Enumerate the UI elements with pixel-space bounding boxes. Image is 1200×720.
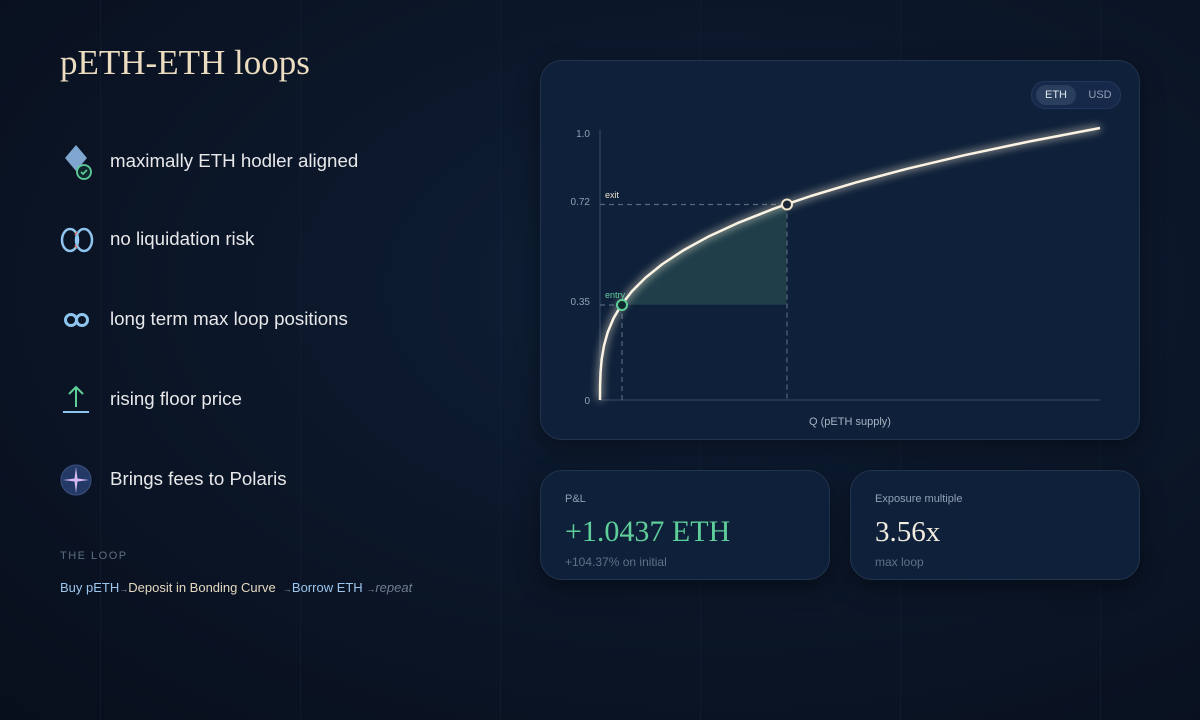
feature: no liquidation: no liquidation risk [110, 228, 254, 249]
feature: hodler aligned: maximally ETH hodler aligned [110, 150, 358, 171]
exposure value: 3.56x [875, 516, 940, 548]
bonding curve chart: 0.72 [571, 197, 590, 208]
feature: max loop: long term max loop positions [110, 308, 348, 329]
bonding curve chart: 0 [584, 396, 590, 407]
panel: P&L [540, 470, 830, 580]
panel: exposure [850, 470, 1140, 580]
bonding curve chart: 0.35 [571, 297, 590, 308]
toggle ETH/USD: ETH [1045, 89, 1067, 101]
toggle ETH/USD [1031, 81, 1121, 109]
section label: the loop: THE LOOP [60, 550, 128, 562]
icon: broken chain [60, 228, 94, 252]
panel: P&L: P&L [565, 493, 586, 505]
feature: rising floor [63, 386, 242, 413]
panel: chart [540, 60, 1140, 440]
icon: polaris star [60, 464, 92, 496]
panel: exposure: max loop [875, 555, 924, 569]
icon: infinity [64, 313, 89, 327]
bonding curve chart: exit [605, 190, 620, 200]
feature: hodler aligned [65, 145, 358, 180]
loop steps: Buy pETH→Deposit in Bonding Curve →Borrow ETH →repeat [60, 580, 412, 595]
panel: P&L: +104.37% on initial [565, 555, 667, 569]
bonding curve chart: entry [605, 290, 626, 300]
feature: rising floor: rising floor price [110, 388, 242, 409]
icon: arrow up floor [63, 386, 89, 413]
feature: fees [60, 464, 287, 496]
bonding curve chart: Q (pETH supply) [809, 416, 891, 428]
feature: no liquidation [60, 228, 254, 252]
panel: exposure: Exposure multiple [875, 493, 962, 505]
P&L value: +1.0437 ETH [565, 515, 730, 548]
bonding curve chart: 1.0 [576, 129, 590, 140]
toggle ETH/USD: USD [1088, 89, 1112, 101]
feature: fees: Brings fees to Polaris [110, 468, 287, 489]
title: pETH-ETH loops [60, 43, 310, 82]
icon: eth diamond with check [65, 145, 92, 180]
